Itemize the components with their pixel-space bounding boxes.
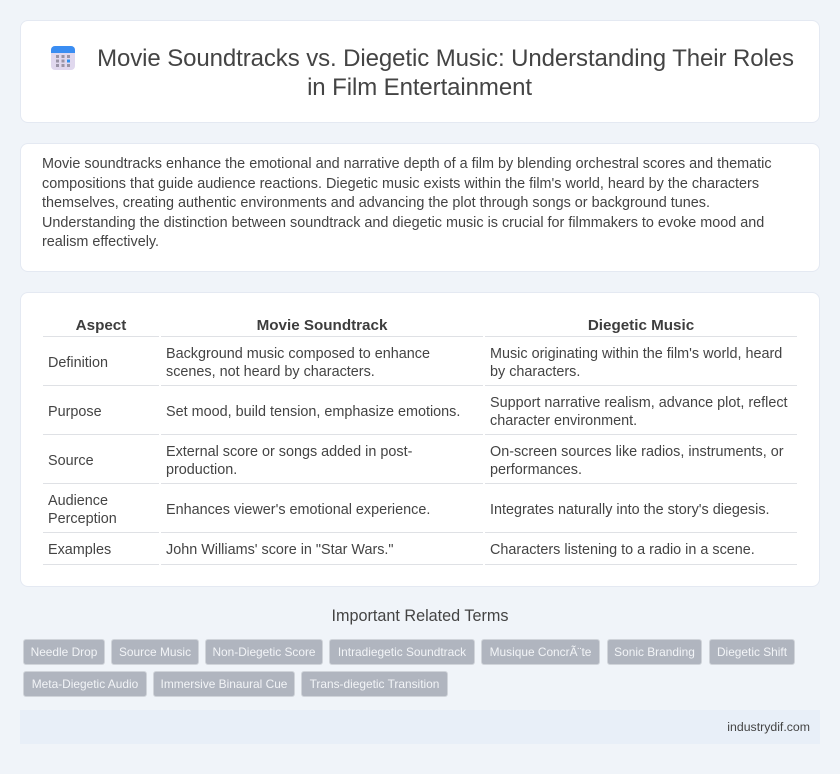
table header: Diegetic Music — [588, 317, 694, 334]
table row: source: production. — [166, 462, 237, 478]
table row: source: On-screen sources like radios, instruments, or — [490, 444, 784, 460]
tag list: related terms: Diegetic Shift — [717, 645, 787, 659]
table row: source: performances. — [490, 462, 582, 478]
table row: definition: Definition — [48, 355, 108, 371]
footer text: source site: industrydif.com — [727, 720, 810, 734]
text block: introduction: compositions that guide audience reactions. Diegetic music exists within the film's world, heard by the characters — [42, 176, 759, 192]
table header: Aspect — [76, 317, 126, 334]
tag list: related terms — [23, 639, 795, 697]
heading: important related terms: Important Related Terms — [332, 607, 508, 625]
table row: examples: Characters listening to a radio in a scene. — [490, 542, 755, 558]
panel: title header — [20, 20, 820, 123]
text block: introduction: Understanding the distinction between soundtrack and diegetic music is crucial for filmmakers to evoke mood and — [42, 214, 764, 230]
table row: definition: Background music composed to enhance — [166, 346, 430, 362]
tag list: related terms: Non-Diegetic Score — [212, 645, 316, 659]
table row: audience perception: Integrates naturally into the story's diegesis. — [490, 502, 770, 518]
table row: purpose — [48, 395, 788, 429]
table row: purpose: Support narrative realism, advance plot, reflect — [490, 395, 788, 411]
panel: introduction text — [20, 143, 820, 272]
table row: audience perception: Enhances viewer's emotional experience. — [166, 502, 430, 518]
table row: source: Source — [48, 453, 94, 469]
title — [97, 45, 794, 101]
table row: examples: John Williams' score in "Star Wars." — [166, 542, 394, 558]
table header: Movie Soundtrack — [257, 317, 387, 334]
table row: purpose: Set mood, build tension, emphasize emotions. — [166, 404, 460, 420]
table row: source: External score or songs added in post- — [166, 444, 412, 460]
tag list: related terms: Sonic Branding — [614, 645, 695, 659]
icon: calendar grid — [51, 46, 75, 70]
title: Movie Soundtracks vs. Diegetic Music: Understanding Their Roles — [97, 45, 794, 72]
table row: purpose: character environment. — [490, 413, 637, 429]
table header — [76, 317, 694, 334]
tag list: related terms: Immersive Binaural Cue — [161, 677, 287, 691]
table row: audience perception — [48, 493, 770, 527]
table row: source — [48, 444, 784, 478]
table row: audience perception: Perception — [48, 511, 117, 527]
text block: introduction: themselves, creating authentic environments and advancing the plot through songs or background tunes. — [42, 195, 710, 211]
table row: examples — [48, 542, 755, 558]
tag list: related terms: Needle Drop — [31, 645, 97, 659]
tag list: related terms: Trans-diegetic Transition — [310, 677, 439, 691]
table row: audience perception: Audience — [48, 493, 108, 509]
footer bar — [20, 710, 820, 744]
table row: purpose: Purpose — [48, 404, 102, 420]
table row: definition: Music originating within the film's world, heard — [490, 346, 782, 362]
panel: comparison table — [20, 292, 820, 587]
tag list: related terms: Intradiegetic Soundtrack — [338, 645, 466, 659]
title: in Film Entertainment — [307, 74, 532, 101]
text block: introduction — [42, 156, 772, 250]
table row: definition — [48, 346, 782, 380]
tag list: related terms: Musique ConcrÃ¨te — [490, 645, 591, 659]
text block: introduction: Movie soundtracks enhance the emotional and narrative depth of a film by blending orchestral scores and thematic — [42, 156, 772, 172]
tag list: related terms: Meta-Diegetic Audio — [32, 677, 138, 691]
table row: examples: Examples — [48, 542, 111, 558]
table row: definition: by characters. — [490, 364, 580, 380]
text block: introduction: realism effectively. — [42, 234, 159, 250]
tag list: related terms: Source Music — [119, 645, 191, 659]
table row: definition: scenes, not heard by characters. — [166, 364, 375, 380]
